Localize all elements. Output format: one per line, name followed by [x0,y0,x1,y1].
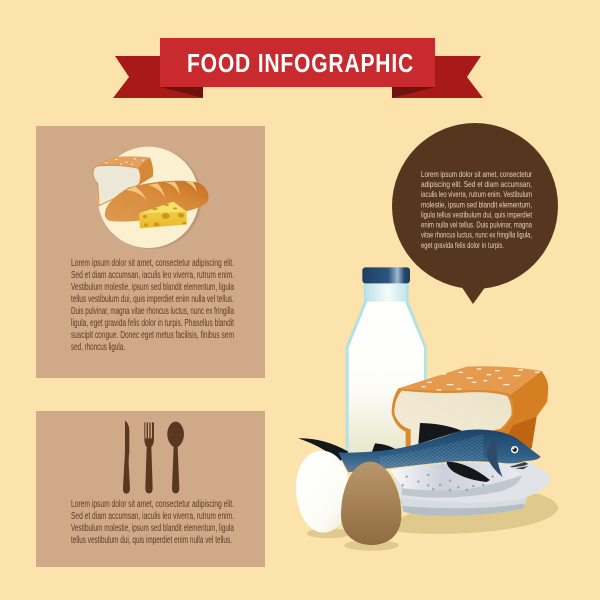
text block: speech bubble: molestie, ipsum sed blandit elementum, [421,200,532,210]
fish eye [511,446,518,453]
bread loaf [392,366,548,450]
text block: bakery: suscipit congue. Donec eget metus facilisis, finibus sem [71,330,234,341]
text block: speech bubble: vitae rhoncus luctus, nunc ex fringilla ligula, [421,230,532,240]
icon: bread and cheese plate [93,147,209,249]
panel: cutlery [36,411,265,567]
ribbon main band [160,38,435,87]
food illustration group [296,267,558,551]
text block: speech bubble: adipiscing elit. Sed et diam accumsan, [421,179,532,189]
table shadows [307,492,558,551]
fish [298,423,541,491]
plate [393,463,550,516]
text block: cutlery: Lorem ipsum dolor sit amet, consectetur adipiscing elit. [71,499,234,510]
text block: bakery: sed, rhoncus ligula. [71,342,125,353]
text block: cutlery: tellus vestibulum dui, quis imperdiet enim nulla vel tellus. [71,535,232,546]
text block: cutlery: Vestibulum molestie, ipsum sed blandit elementum, ligula [71,523,234,534]
text block: speech bubble: iaculis leo viverra, rutrum enim. Vestibulum [421,189,532,199]
text block: bakery [71,258,234,353]
text block: speech bubble: enim nulla vel tellus. Duis pulvinar, magna [421,220,532,230]
text block: bakery: Sed et diam accumsan, iaculis leo viverra, rutrum enim. [71,270,234,281]
text block: cutlery: Sed et diam accumsan, iaculis leo viverra, rutrum enim. [71,511,234,522]
brown egg [341,462,401,545]
ribbon left tail [113,56,203,98]
text block: bakery: tellus vestibulum dui, quis imperdiet enim nulla vel tellus. [71,294,234,305]
text block: speech bubble: Lorem ipsum dolor sit amet, consectetur [421,169,532,179]
text block: bakery: Lorem ipsum dolor sit amet, consectetur adipiscing elit. [71,258,234,269]
title ribbon [113,38,483,98]
text block: cutlery [71,499,234,546]
text block: speech bubble: ligula tellus vestibulum dui, quis imperdiet [421,210,532,220]
text block: speech bubble [421,169,532,250]
text block: bakery: ligula, eget gravida felis dolor in turpis. Phasellus blandit [71,318,234,329]
text block: bakery: Vestibulum molestie, ipsum sed blandit elementum, ligula [71,282,234,293]
milk bottle [346,267,427,460]
text block: bakery: Duis pulvinar, magna vitae rhoncus luctus, nunc ex fringilla [71,306,234,317]
icon: knife, fork and spoon [123,421,184,494]
text block: speech bubble: eget gravida felis dolor in turpis. [421,240,504,250]
speech bubble [392,123,558,304]
panel: bakery [36,126,265,378]
white egg [296,451,349,533]
title: FOOD INFOGRAPHIC [187,48,414,78]
ribbon right tail [392,56,483,98]
